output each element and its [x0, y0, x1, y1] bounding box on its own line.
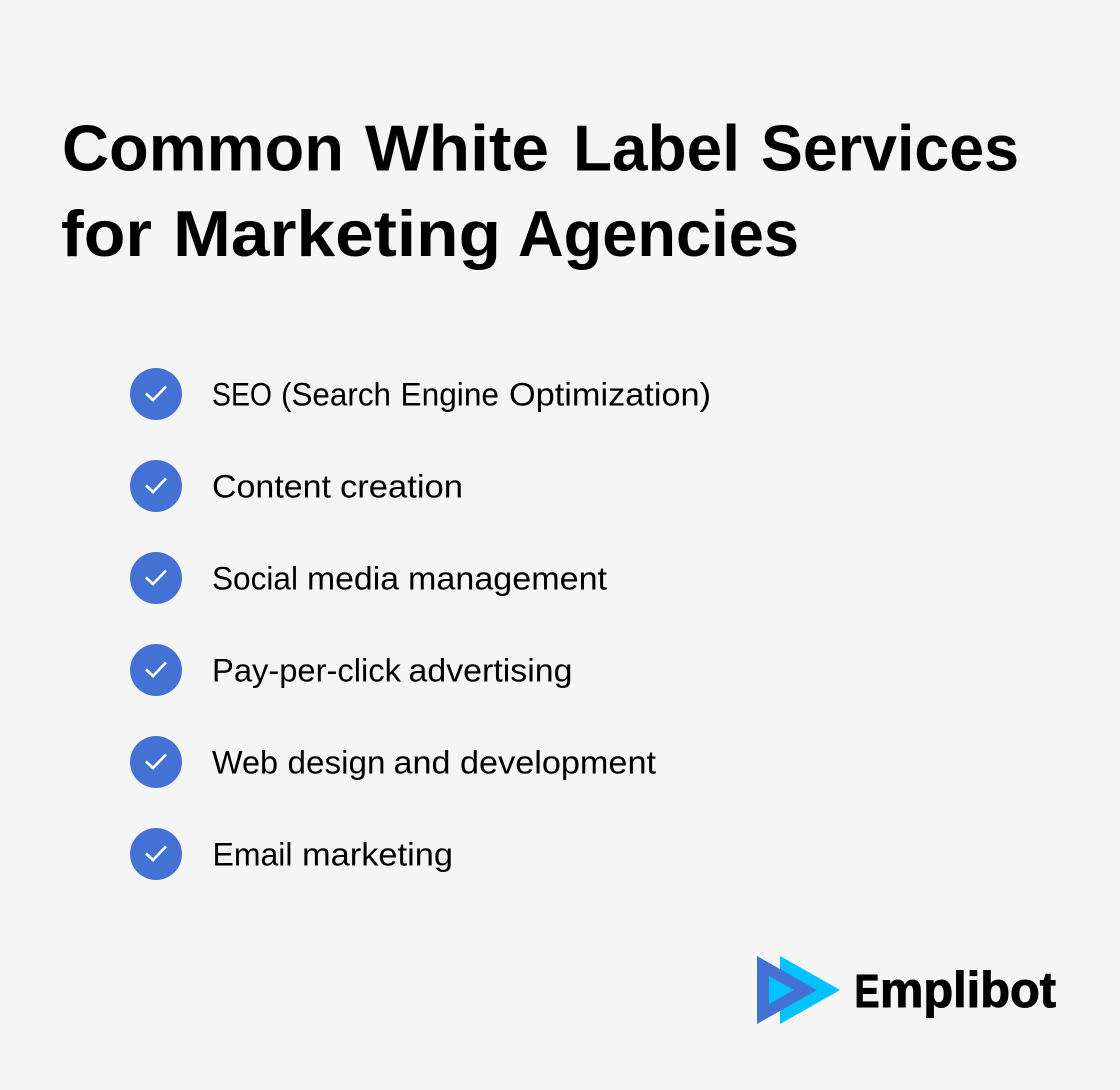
icon: check circle	[130, 736, 182, 788]
label: social media management: Social	[212, 560, 298, 596]
title: Marketing	[173, 197, 501, 270]
label: content creation	[212, 468, 463, 504]
item: web design and development	[130, 736, 656, 788]
icon: check circle	[130, 552, 182, 604]
label: SEO: SEO	[212, 376, 272, 412]
icon: check circle	[130, 644, 182, 696]
icon: check circle	[130, 828, 182, 880]
title: Common	[62, 112, 344, 184]
wordmark: E	[854, 965, 880, 1017]
label: pay-per-click advertising: advertising	[408, 652, 572, 688]
label: web design and development: Web	[212, 744, 278, 780]
label: web design and development: design	[288, 744, 386, 780]
label: social media management: media	[307, 560, 399, 596]
label: SEO	[212, 376, 711, 412]
title: White	[365, 112, 549, 184]
logo: Emplibot	[757, 956, 1056, 1024]
label: web design and development: development	[460, 744, 656, 780]
item: pay-per-click advertising	[130, 644, 572, 696]
label: web design and development	[212, 744, 656, 780]
icon: check circle	[130, 460, 182, 512]
title	[61, 112, 1019, 270]
label: web design and development: and	[394, 744, 450, 780]
item: content creation	[130, 460, 463, 512]
label: social media management: management	[408, 560, 607, 596]
label: SEO: Engine	[400, 376, 499, 412]
title: Services	[761, 112, 1019, 184]
label: email marketing: marketing	[302, 836, 453, 872]
label: SEO: (Search	[281, 376, 391, 412]
title: Label	[573, 112, 740, 184]
label: email marketing: Email	[212, 836, 292, 872]
wordmark: mplibot	[880, 962, 1056, 1018]
icon: check circle	[130, 368, 182, 420]
label: pay-per-click advertising	[212, 652, 572, 688]
label: social media management	[212, 560, 607, 596]
label: pay-per-click advertising: Pay-per-click	[212, 652, 402, 688]
checklist of services	[130, 368, 711, 880]
label: email marketing	[212, 836, 453, 872]
item: social media management	[130, 552, 607, 604]
label: content creation: creation	[340, 468, 463, 504]
item: SEO	[130, 368, 711, 420]
title: for	[61, 197, 152, 270]
icon: play triangles	[757, 956, 840, 1024]
label: SEO: Optimization)	[509, 376, 711, 412]
label: content creation: Content	[212, 468, 331, 504]
title: Agencies	[518, 197, 799, 270]
item: email marketing	[130, 828, 453, 880]
